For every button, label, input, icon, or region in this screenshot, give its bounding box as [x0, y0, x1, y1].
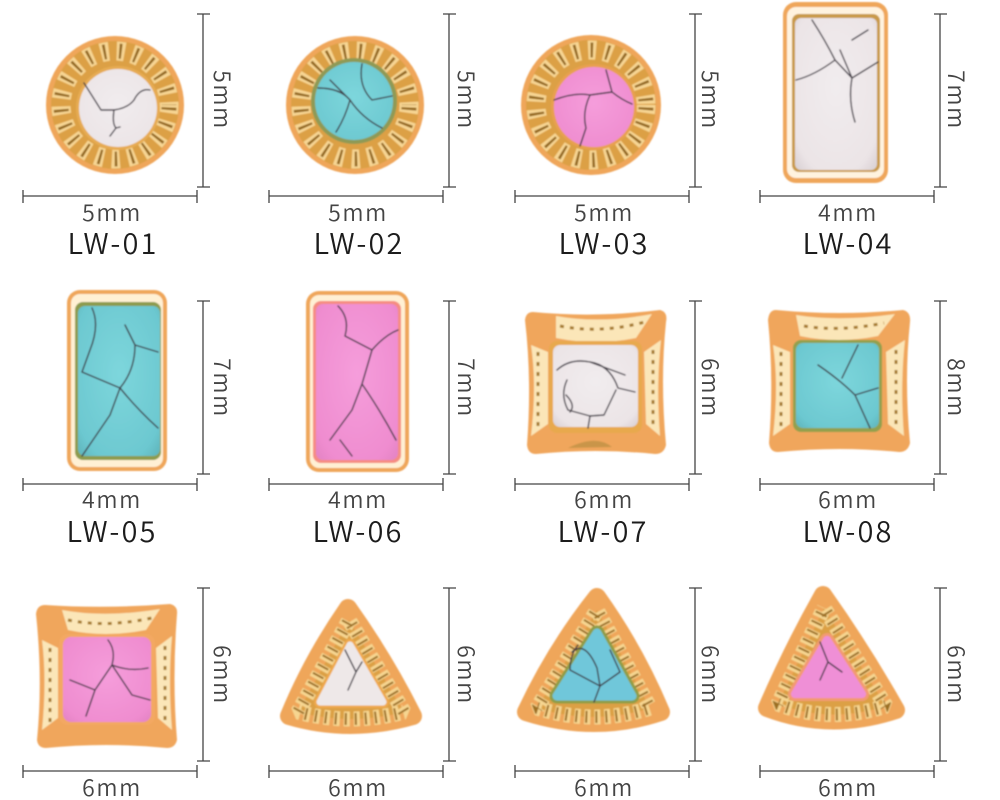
- dimension: width 5mm: [269, 190, 443, 228]
- dimension: width 5mm: 5mm: [82, 194, 142, 228]
- label LW-04: LW-04: [802, 221, 894, 263]
- dimension: width 4mm: [760, 190, 934, 228]
- dimension: height 6mm: 6mm: [207, 645, 241, 705]
- dimension: height 6mm: 6mm: [695, 358, 729, 418]
- icon: rectangular gold charm with turquoise stone: [67, 290, 167, 471]
- label LW-02: LW-02: [313, 221, 405, 263]
- item LW-04: rectangular white marble charm: [760, 2, 975, 263]
- dimension: width 4mm: 4mm: [328, 481, 388, 515]
- item LW-11: triangular turquoise marble charm: [515, 588, 729, 800]
- icon: round gold charm with turquoise stone: [286, 36, 424, 174]
- dimension: height 6mm: [443, 588, 485, 761]
- dimension: width 4mm: 4mm: [818, 194, 878, 228]
- dimension: height 5mm: 5mm: [207, 70, 241, 130]
- dimension: width 5mm: 5mm: [328, 194, 388, 228]
- label LW-01: LW-01: [67, 221, 159, 263]
- label LW-03: LW-03: [558, 221, 650, 263]
- dimension: width 6mm: [515, 478, 689, 515]
- dimension: width 4mm: 4mm: [82, 481, 142, 515]
- dimension: height 5mm: 5mm: [451, 70, 485, 130]
- item LW-05: rectangular turquoise marble charm: [23, 290, 241, 551]
- dimension: width 6mm: [760, 765, 934, 800]
- dimension: height 6mm: [197, 588, 241, 761]
- dimension: height 7mm: 7mm: [451, 358, 485, 418]
- item LW-12: triangular pink marble charm: [760, 588, 975, 800]
- label LW-05: LW-05: [66, 509, 158, 551]
- label LW-06: LW-06: [312, 509, 404, 551]
- dimension: width 6mm: [23, 765, 197, 800]
- dimension: width 6mm: [515, 765, 689, 800]
- dimension: height 5mm: 5mm: [695, 70, 729, 130]
- dimension: width 6mm: 6mm: [574, 481, 634, 515]
- icon: triangular gold charm with white stone: [289, 608, 413, 725]
- dimension: height 7mm: [443, 301, 485, 474]
- item LW-08: square turquoise marble charm: [760, 301, 975, 551]
- dimension: width 6mm: [760, 478, 934, 515]
- dimension: width 5mm: [515, 190, 689, 228]
- icon: square gold charm with white stone: [525, 310, 666, 454]
- dimension: height 6mm: 6mm: [451, 645, 485, 705]
- dimension: height 5mm: [689, 14, 729, 187]
- dimension: width 5mm: 5mm: [574, 194, 634, 228]
- dimension: height 7mm: [934, 14, 975, 187]
- dimension: width 6mm: [269, 765, 443, 800]
- item LW-01: round white marble charm: [23, 14, 241, 263]
- label LW-08: LW-08: [802, 509, 894, 551]
- dimension: height 7mm: 7mm: [941, 70, 975, 130]
- item LW-07: square white marble charm: [515, 301, 729, 551]
- dimension: width 4mm: [269, 478, 443, 515]
- item LW-09: square pink marble charm: [23, 588, 241, 800]
- dimension: height 6mm: [689, 588, 729, 761]
- dimension: width 6mm: 6mm: [818, 481, 878, 515]
- dimension: height 8mm: [934, 301, 975, 474]
- dimension: height 7mm: 7mm: [207, 358, 241, 418]
- item LW-10: triangular white marble charm: [269, 588, 485, 800]
- dimension: height 6mm: 6mm: [941, 645, 975, 705]
- dimension: width 5mm: [23, 190, 197, 228]
- dimension: height 5mm: [197, 14, 241, 187]
- icon: rectangular gold charm with pink stone: [306, 291, 409, 472]
- item LW-02: round turquoise marble charm: [269, 14, 485, 263]
- icon: triangular gold charm with turquoise stone: [526, 597, 661, 723]
- icon: square gold charm with turquoise stone: [768, 310, 910, 452]
- icon: triangular gold charm with pink stone: [767, 595, 896, 721]
- icon: round gold charm with pink stone: [521, 35, 661, 175]
- dimension: height 8mm: 8mm: [941, 358, 975, 418]
- icon: round gold charm with white stone: [46, 36, 184, 174]
- dimension: width 4mm: [23, 478, 197, 515]
- dimension: height 6mm: 6mm: [695, 645, 729, 705]
- item LW-03: round pink marble charm: [515, 14, 729, 263]
- item LW-06: rectangular pink marble charm: [269, 291, 485, 551]
- dimension: height 6mm: [689, 301, 729, 474]
- dimension: height 7mm: [197, 301, 241, 474]
- dimension: height 6mm: [934, 588, 975, 761]
- dimension: height 5mm: [443, 14, 485, 187]
- icon: square gold charm with pink stone: [36, 604, 177, 748]
- icon: rectangular gold charm with white stone: [783, 2, 888, 183]
- label LW-07: LW-07: [557, 509, 649, 551]
